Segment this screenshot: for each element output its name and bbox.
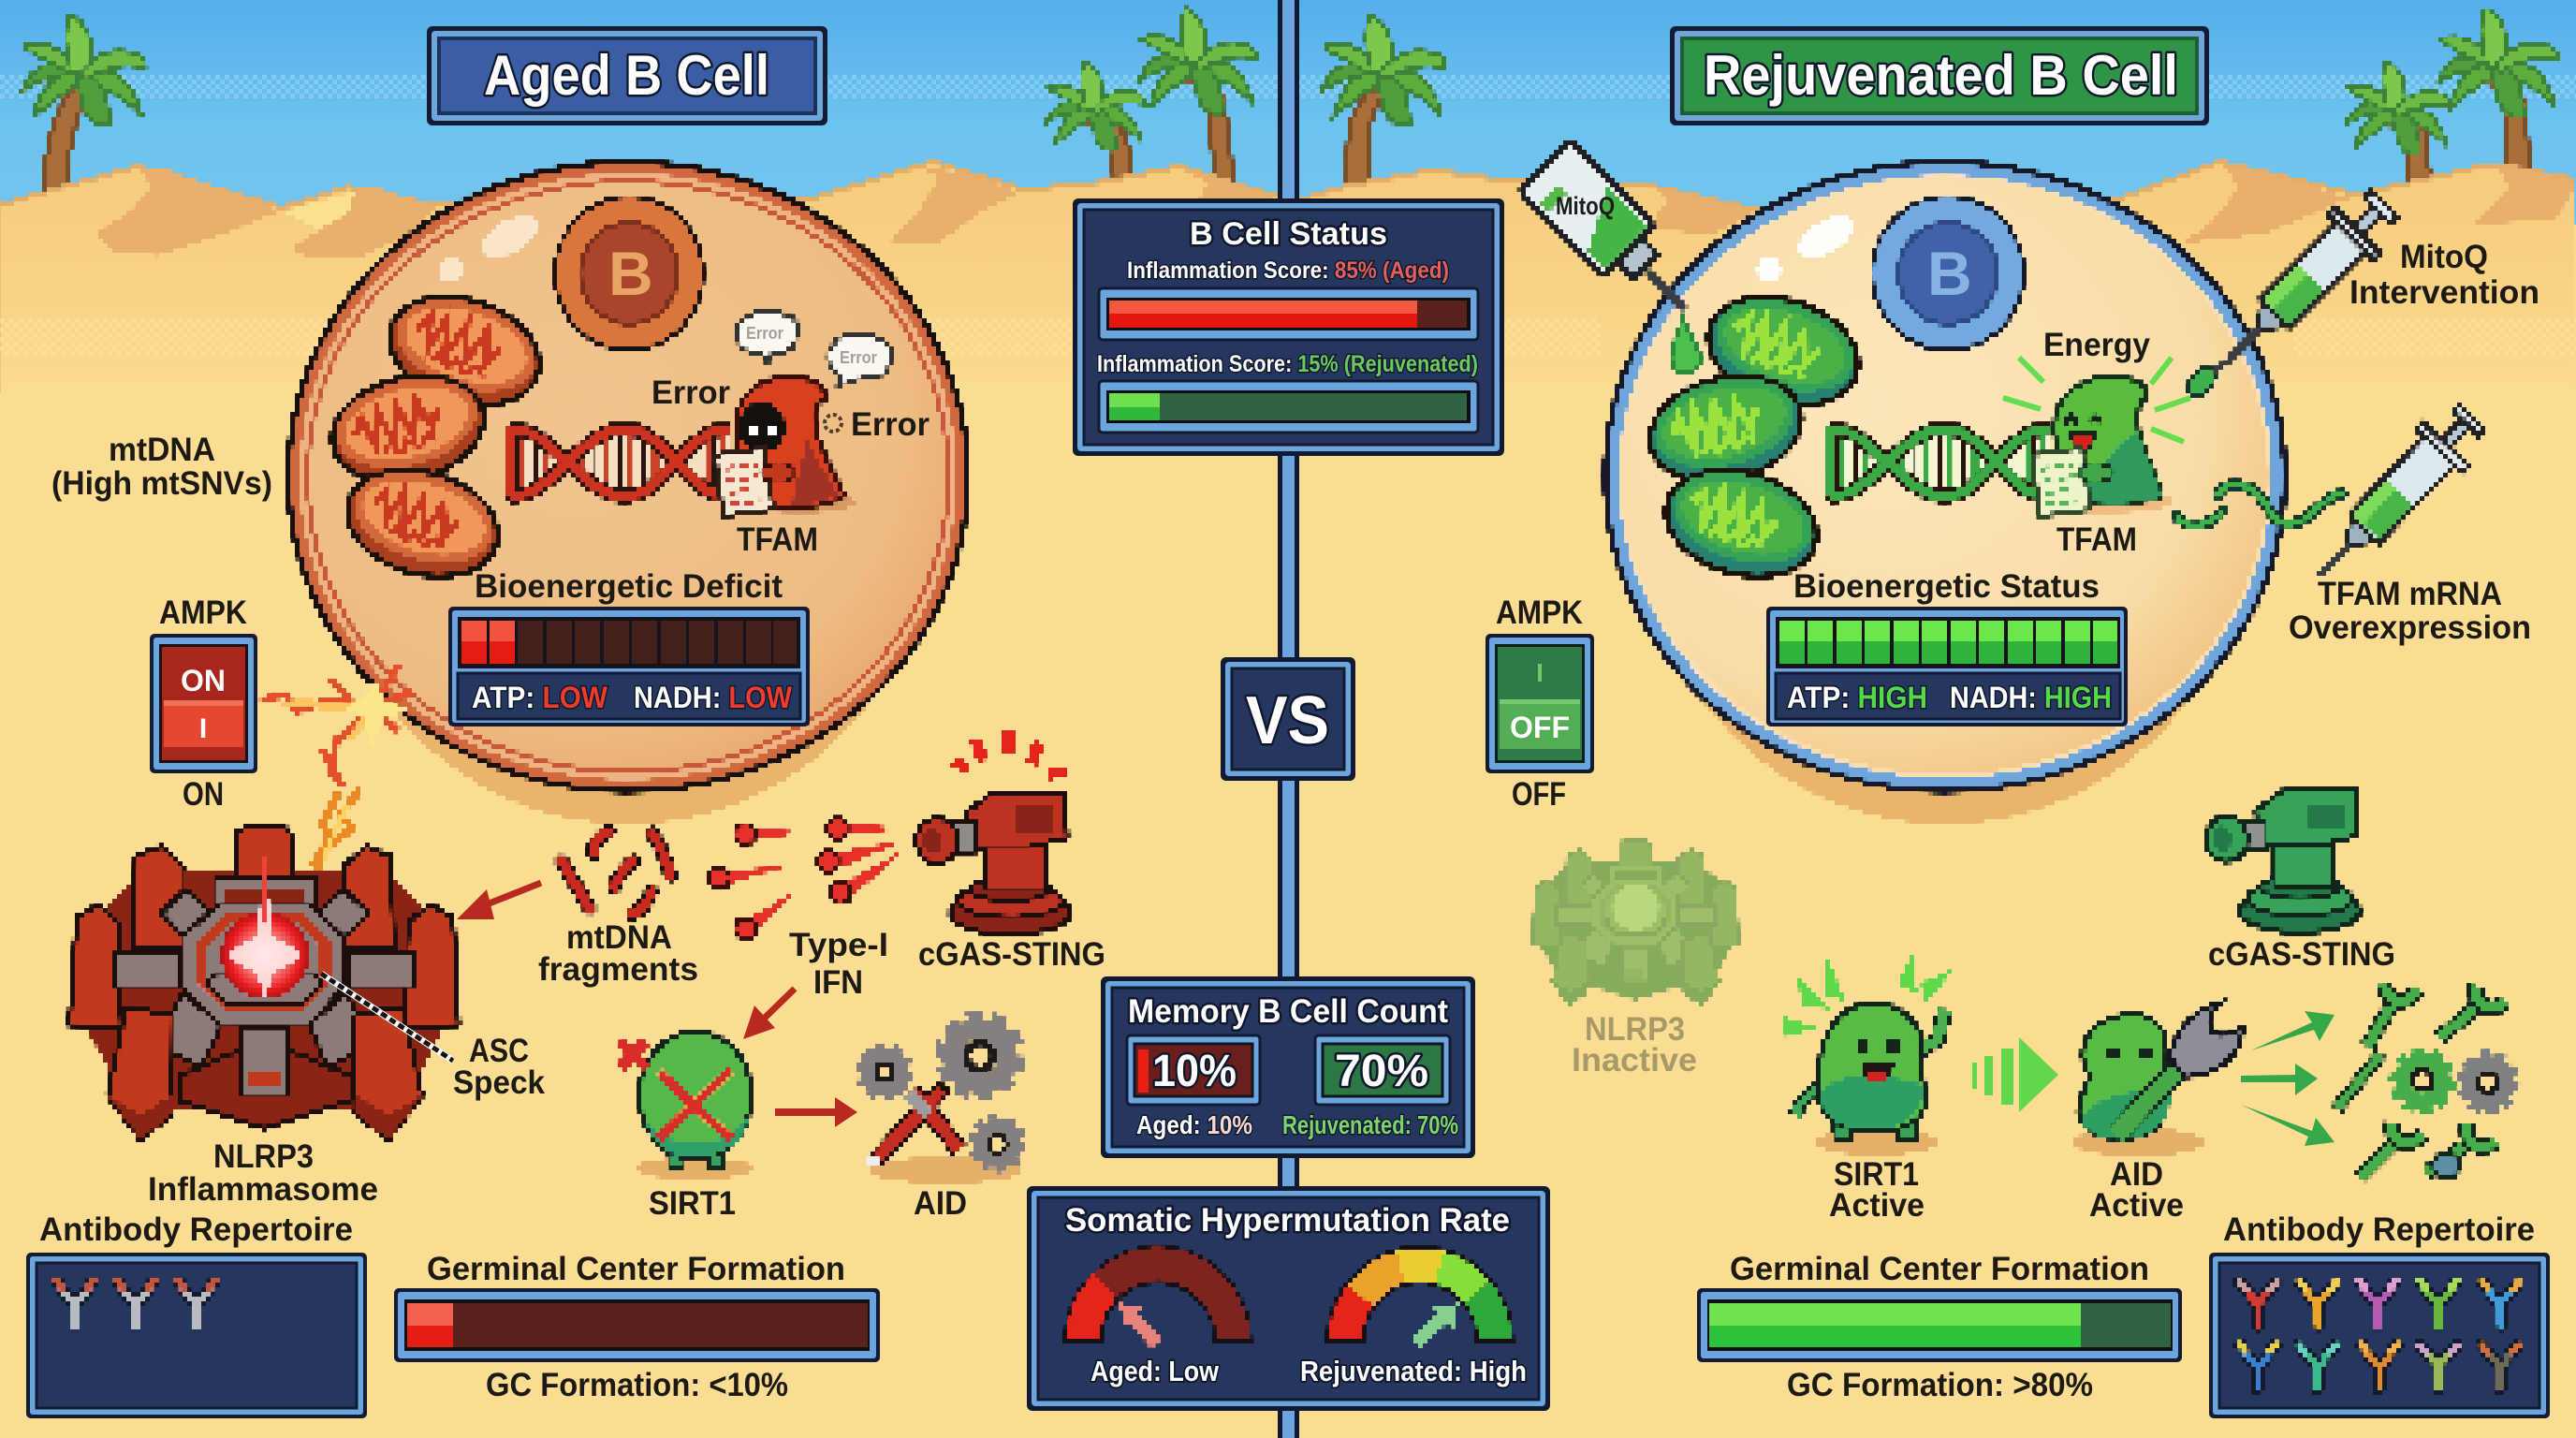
panel: B Cell Status: B Cell Status: [1190, 216, 1387, 252]
label: Bioenergetic Deficit: Bioenergetic Deficit: [475, 568, 783, 605]
panel: Memory B Cell Count: Memory B Cell Count: [1128, 993, 1448, 1030]
label: Error: Error: [851, 406, 929, 443]
arrow: SIRT1 to AID active: [1972, 1037, 2058, 1112]
pointer line: ASC Speck: [321, 974, 453, 1061]
icon: MitoQ drop: [1672, 318, 1700, 373]
stat: rejuvenated 70%: [1315, 1035, 1450, 1105]
bar chart: GC formation rejuvenated: [1697, 1288, 2182, 1362]
label: NLRP3 Inactive: Inactive: [1572, 1042, 1697, 1078]
icon: cGAS-STING cannon active: [916, 792, 1070, 934]
icon: mitochondria: [1639, 279, 1872, 593]
label: Type-I IFN: IFN: [813, 964, 863, 1001]
label: mtDNA fragments: mtDNA: [566, 919, 672, 956]
label: MitoQ Intervention: [2349, 239, 2539, 311]
VS badge: VS: [1246, 683, 1329, 758]
icon: NLRP3 inflammasome active: [69, 828, 459, 1139]
icon: SIRT1 active character: [1795, 1004, 1945, 1155]
icon: AMPK switch on: I: [199, 713, 207, 744]
label: mtDNA High mtSNVs: [51, 432, 272, 502]
label: AMPK: AMPK: [1496, 594, 1583, 631]
icon: AMPK switch off: [1486, 634, 1594, 773]
icon: AMPK switch on: ON: [181, 664, 226, 697]
label: cGAS-STING: cGAS-STING: [918, 936, 1105, 973]
label: SIRT1 Active: SIRT1: [1834, 1156, 1919, 1193]
icon: AID broken tools: [860, 1019, 1022, 1183]
central divider pole: [1278, 0, 1299, 1438]
stat: aged 10%: 10%: [1152, 1047, 1237, 1096]
panel: ATP NADH meter: [1766, 607, 2128, 726]
icon: mtDNA helix: [1831, 425, 2048, 500]
title: Rejuvenated B Cell: Rejuvenated B Cell: [1704, 44, 2178, 107]
label: TFAM mRNA Overexpression: [2289, 576, 2531, 646]
label: MitoQ Intervention: MitoQ: [2400, 239, 2488, 275]
icon: SIRT1 sparks: [1782, 953, 1953, 1037]
icon: error thought bubbles: Error: [840, 348, 877, 367]
panel: ATP NADH meter: NADH: LOW: [634, 681, 793, 714]
panel: B Cell Status: Inflammation Score: 85% (Aged): [1127, 257, 1449, 284]
label: GC Formation >80%: GC Formation: >80%: [1787, 1367, 2093, 1403]
label: ASC Speck: ASC: [469, 1033, 529, 1069]
panel: ATP NADH meter: [448, 607, 810, 726]
label: Antibody Repertoire: Antibody Repertoire: [39, 1211, 353, 1248]
label: TFAM mRNA Overexpression: Overexpression: [2289, 609, 2531, 646]
icon: error thought bubbles: [736, 310, 892, 432]
icon: NLRP3 inactive: [1532, 840, 1738, 1005]
label: Germinal Center Formation aged: Germinal Center Formation: [427, 1251, 845, 1287]
icon: AMPK switch off: OFF: [1510, 711, 1570, 744]
label: SIRT1: SIRT1: [649, 1185, 736, 1222]
label: TFAM mRNA Overexpression: TFAM mRNA: [2318, 576, 2502, 612]
label: mtDNA fragments: fragments: [538, 951, 698, 988]
panel: Memory B Cell Count: [1101, 976, 1475, 1158]
panel: ATP NADH meter: ATP: HIGH: [1787, 681, 1927, 714]
gauge: rejuvenated high: [1345, 1265, 1495, 1343]
label: cGAS-STING: cGAS-STING: [2208, 936, 2395, 973]
arrow: IFN to SIRT1: [743, 989, 795, 1039]
panel: Somatic Hypermutation Rate: [1027, 1186, 1550, 1411]
panel: B Cell Status: [1073, 198, 1504, 456]
icon: energy sparks: [2003, 358, 2190, 442]
label: NLRP3 Inflammasome: NLRP3: [213, 1138, 314, 1175]
icon: TFAM syringe: [2297, 395, 2495, 597]
icon: AMPK switch off: I: [1536, 658, 1544, 687]
label: MitoQ Intervention: Intervention: [2349, 274, 2539, 311]
label: GC Formation <10%: GC Formation: <10%: [486, 1367, 788, 1403]
icon: mRNA strand: [2177, 485, 2342, 525]
icon: error thought bubbles: Error: [746, 324, 783, 343]
label: mtDNA High mtSNVs: mtDNA: [109, 432, 215, 468]
label: AID: AID: [914, 1185, 967, 1222]
icon: nucleus B: B: [608, 239, 653, 308]
label: Germinal Center Formation rejuvenated: Germinal Center Formation: [1730, 1251, 2149, 1287]
title: Aged B Cell: Aged B Cell: [484, 44, 769, 107]
label: ASC Speck: Speck: [453, 1064, 546, 1101]
label: Bioenergetic Status: Bioenergetic Status: [1793, 568, 2100, 605]
label: NLRP3 Inflammasome: [148, 1138, 378, 1208]
title: Rejuvenated B Cell: [1670, 26, 2209, 125]
label: mtDNA High mtSNVs: (High mtSNVs): [51, 465, 272, 502]
panel: ATP NADH meter: NADH: HIGH: [1950, 681, 2112, 714]
VS badge: [1221, 657, 1355, 781]
label: TFAM: TFAM: [737, 521, 818, 558]
icon: type-I IFN projectiles: [710, 818, 903, 939]
label: AMPK: AMPK: [159, 594, 247, 631]
label: NLRP3 Inflammasome: Inflammasome: [148, 1171, 378, 1208]
icon: mtDNA fragments: [562, 831, 670, 914]
gauge: aged low: [1083, 1264, 1233, 1343]
panel: Memory B Cell Count: Aged: 10%: [1136, 1110, 1252, 1139]
label: AID Active: Active: [2089, 1187, 2184, 1224]
icon: AID active character: [2072, 1004, 2243, 1156]
label: NLRP3 Inactive: NLRP3: [1585, 1011, 1685, 1048]
label: AID Active: [2089, 1156, 2184, 1224]
label: Error: Error: [651, 374, 730, 411]
label: TFAM: TFAM: [2056, 521, 2137, 558]
label: Energy: Energy: [2043, 327, 2151, 363]
panel: B Cell Status: Inflammation Score: 15% (Rejuvenated): [1097, 351, 1478, 377]
panel: rejuvenated antibody repertoire: [2209, 1253, 2550, 1418]
icon: mitochondria: [321, 279, 553, 593]
label: NLRP3 Inactive: [1572, 1011, 1697, 1078]
label: Antibody Repertoire: Antibody Repertoire: [2223, 1211, 2535, 1248]
panel: Somatic Hypermutation Rate: Somatic Hypermutation Rate: [1065, 1202, 1510, 1239]
label: ON: ON: [183, 776, 224, 813]
title: Aged B Cell: [427, 26, 827, 125]
stat: rejuvenated 70%: 70%: [1335, 1047, 1428, 1096]
icon: SIRT1 inhibited: [621, 1032, 753, 1180]
icon: nucleus B: [553, 195, 705, 352]
icon: nucleus B: B: [1927, 239, 1972, 308]
label: ASC Speck: [453, 1033, 546, 1101]
arrow: fragments to NLRP3: [457, 883, 541, 919]
label: mtDNA fragments: [538, 919, 698, 988]
icon: MitoQ syringe: [2184, 182, 2407, 401]
icon: cGAS-STING cannon inactive: [2206, 790, 2360, 932]
arrow: SIRT1 to AID: [775, 1097, 857, 1127]
panel: Somatic Hypermutation Rate: Aged: Low: [1090, 1355, 1220, 1387]
label: OFF: OFF: [1512, 776, 1566, 813]
icon: MitoQ bottle: MitoQ: [1556, 192, 1615, 220]
icon: red sparks: [951, 732, 1067, 781]
panel: aged antibody repertoire: [26, 1253, 367, 1418]
panel: Memory B Cell Count: Rejuvenated: 70%: [1282, 1110, 1458, 1139]
icon: lightning spark: [260, 665, 412, 871]
label: SIRT1 Active: [1829, 1156, 1925, 1224]
panel: ATP NADH meter: ATP: LOW: [472, 681, 608, 714]
arrows: AID to tools: [2241, 1011, 2334, 1146]
icon: nucleus B: [1870, 195, 2026, 352]
stat: aged 10%: [1127, 1035, 1260, 1105]
bar chart: GC formation aged: [394, 1288, 880, 1362]
panel: Somatic Hypermutation Rate: Rejuvenated: High: [1300, 1355, 1527, 1387]
icon: TFAM happy figure: [2032, 376, 2174, 516]
icon: TFAM hooded figure: [715, 376, 855, 516]
label: SIRT1 Active: Active: [1829, 1187, 1925, 1224]
panel: aged B cell: [285, 159, 971, 824]
icon: MitoQ bottle: [1519, 140, 1685, 309]
panel: rejuvenated B cell: [1603, 159, 2288, 824]
icon: mtDNA helix: [511, 425, 728, 500]
label: AID Active: AID: [2110, 1156, 2163, 1193]
label: Type-I IFN: [789, 927, 888, 1001]
label: Type-I IFN: Type-I: [789, 927, 888, 963]
icon: AMPK switch on: [150, 634, 257, 773]
icon: repaired tools: [2336, 979, 2515, 1188]
